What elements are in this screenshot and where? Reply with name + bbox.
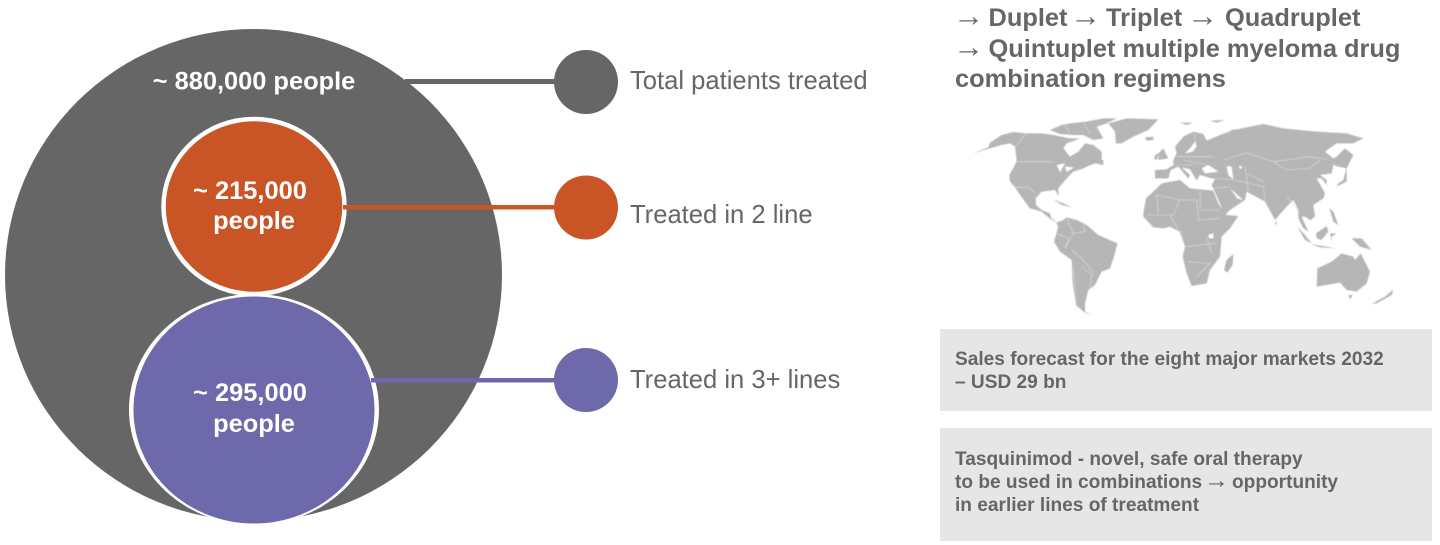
panel: Tasquinimod bbox=[940, 428, 1432, 541]
legend marker: 2 lines bbox=[554, 176, 618, 240]
value: treated in 2 lines: people bbox=[213, 207, 295, 235]
text: Tasquinimod: to be used in combinations bbox=[955, 472, 1202, 493]
map: Africa and Madagascar bbox=[1143, 180, 1238, 286]
text: Tasquinimod: opportunity bbox=[1232, 472, 1338, 493]
heading: drug combination regimens: Duplet bbox=[988, 4, 1068, 32]
map: Asia-Pacific islands and Australia bbox=[1275, 208, 1393, 304]
legend label: total patients: Total patients treated bbox=[630, 67, 868, 95]
circle: treated in 2 lines bbox=[164, 119, 344, 294]
heading: drug combination regimens: → bbox=[953, 29, 984, 64]
connector: total patients bbox=[405, 79, 560, 84]
value: treated in 2 lines: ~ 215,000 bbox=[193, 177, 307, 205]
connector: 2 lines bbox=[343, 205, 558, 210]
panel: sales forecast bbox=[940, 329, 1432, 411]
legend label: 3+ lines: Treated in 3+ lines bbox=[630, 366, 840, 394]
value: treated in 3+ lines: people bbox=[213, 410, 295, 438]
value: treated in 3+ lines: ~ 295,000 bbox=[193, 379, 307, 407]
heading: drug combination regimens: combination regimens bbox=[955, 65, 1226, 93]
heading: drug combination regimens: Quadruplet bbox=[1225, 4, 1361, 32]
map: Eurasia bbox=[1154, 120, 1363, 220]
text: Tasquinimod: in earlier lines of treatment bbox=[955, 495, 1200, 516]
map: Americas north and Greenland bbox=[973, 118, 1158, 220]
map: South America bbox=[1040, 211, 1117, 316]
text: Tasquinimod: → bbox=[1204, 466, 1229, 494]
legend marker: total patients bbox=[554, 50, 618, 114]
text: sales forecast: – USD 29 bn bbox=[955, 372, 1066, 393]
heading: drug combination regimens: Triplet bbox=[1106, 4, 1183, 32]
value: total patients: ~ 880,000 people bbox=[153, 68, 355, 96]
text: Tasquinimod: Tasquinimod - novel, safe oral therapy bbox=[955, 449, 1303, 470]
text: sales forecast: Sales forecast for the eight major markets 2032 bbox=[955, 349, 1384, 370]
connector: 3+ lines bbox=[371, 378, 558, 382]
legend label: 2 lines: Treated in 2 line bbox=[630, 201, 813, 229]
world map bbox=[973, 118, 1393, 316]
legend marker: 3+ lines bbox=[554, 348, 618, 412]
circle: treated in 3+ lines bbox=[129, 294, 379, 525]
heading: drug combination regimens: Quintuplet multiple myeloma drug bbox=[988, 35, 1400, 63]
